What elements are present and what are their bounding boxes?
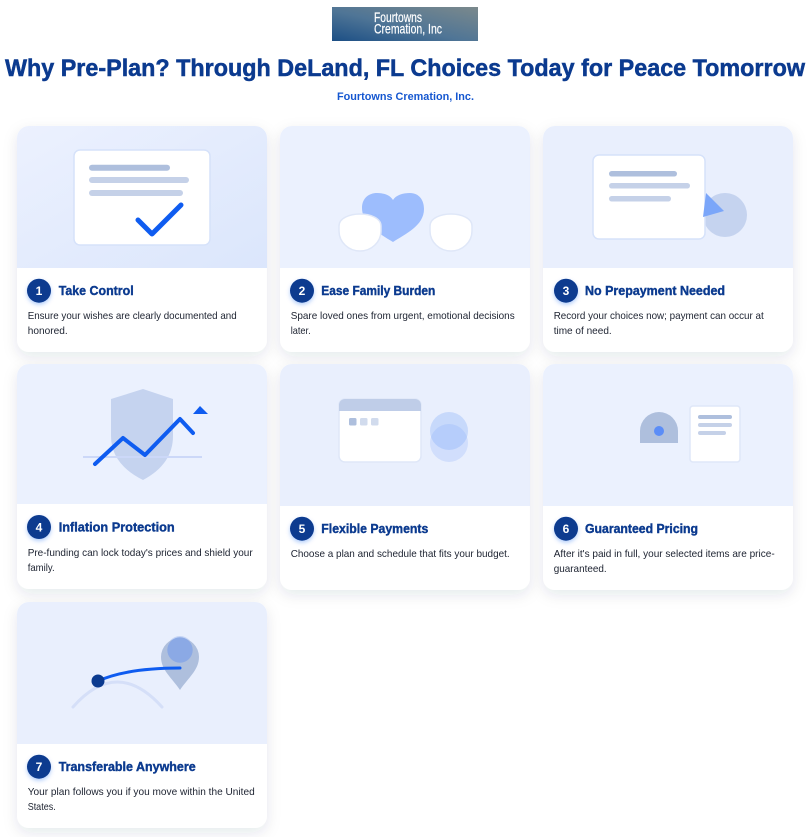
heading: No Prepayment Needed — [585, 283, 725, 298]
description: time of need. — [554, 325, 612, 337]
description: family. — [28, 562, 55, 574]
heading: Inflation Protection — [59, 520, 175, 535]
number badge 4: 4 — [36, 520, 43, 534]
description — [28, 786, 255, 813]
panel: 2 Ease Family Burden — [280, 126, 530, 352]
description — [28, 547, 253, 574]
number badge 6 — [554, 517, 578, 541]
panel: 6 Guaranteed Pricing — [543, 364, 793, 590]
description: later. — [291, 325, 311, 337]
number badge 2: 2 — [299, 284, 306, 298]
logo: Fourtowns — [374, 9, 422, 25]
panel: 1 Take Control — [17, 126, 267, 352]
number badge 1: 1 — [36, 284, 43, 298]
number badge 7: 7 — [36, 760, 43, 774]
description: Spare loved ones from urgent, emotional decisions — [291, 310, 515, 322]
number badge 5 — [290, 517, 314, 541]
icon: heart and two hands — [339, 193, 472, 251]
number badge 3: 3 — [563, 284, 570, 298]
description: Ensure your wishes are clearly documented and — [28, 310, 237, 322]
heading: Transferable Anywhere — [59, 759, 196, 774]
panel: 5 Flexible Payments — [280, 364, 530, 590]
description — [291, 310, 515, 337]
icon: lock dome and document — [640, 406, 740, 462]
icon: route to map pin — [73, 636, 199, 707]
number badge 7 — [27, 755, 51, 779]
number badge 1 — [27, 279, 51, 303]
icon: shield and rising chart — [83, 389, 208, 480]
logo — [332, 7, 478, 41]
logo: Cremation, Inc — [374, 20, 442, 36]
icon: calendar and coins — [339, 399, 468, 462]
icon: document with pie — [593, 155, 747, 239]
description: Choose a plan and schedule that fits your budget. — [291, 548, 510, 560]
number badge 6: 6 — [563, 522, 570, 536]
heading: Flexible Payments — [321, 521, 428, 536]
description — [554, 548, 775, 575]
heading: Ease Family Burden — [321, 283, 435, 298]
description: Pre-funding can lock today's prices and shield your — [28, 547, 253, 559]
description: Record your choices now; payment can occur at — [554, 310, 764, 322]
description — [554, 310, 764, 337]
description: States. — [28, 801, 56, 813]
number badge 3 — [554, 279, 578, 303]
description — [28, 310, 237, 337]
heading: Guaranteed Pricing — [585, 521, 698, 536]
description: guaranteed. — [554, 563, 607, 575]
number badge 4 — [27, 515, 51, 539]
icon: document with check — [74, 150, 210, 245]
subtitle: Fourtowns Cremation, Inc. — [337, 91, 474, 103]
description: Your plan follows you if you move within the United — [28, 786, 255, 798]
number badge 2 — [290, 279, 314, 303]
description: After it's paid in full, your selected items are price- — [554, 548, 775, 560]
panel: 3 No Prepayment Needed — [543, 126, 793, 352]
heading: Take Control — [59, 283, 134, 298]
panel: 4 Inflation Protection — [17, 364, 267, 589]
title: Why Pre-Plan? Through DeLand, FL Choices Today for Peace Tomorrow — [5, 55, 805, 82]
description: honored. — [28, 325, 68, 337]
number badge 5: 5 — [299, 522, 306, 536]
panel: 7 Transferable Anywhere — [17, 602, 267, 828]
